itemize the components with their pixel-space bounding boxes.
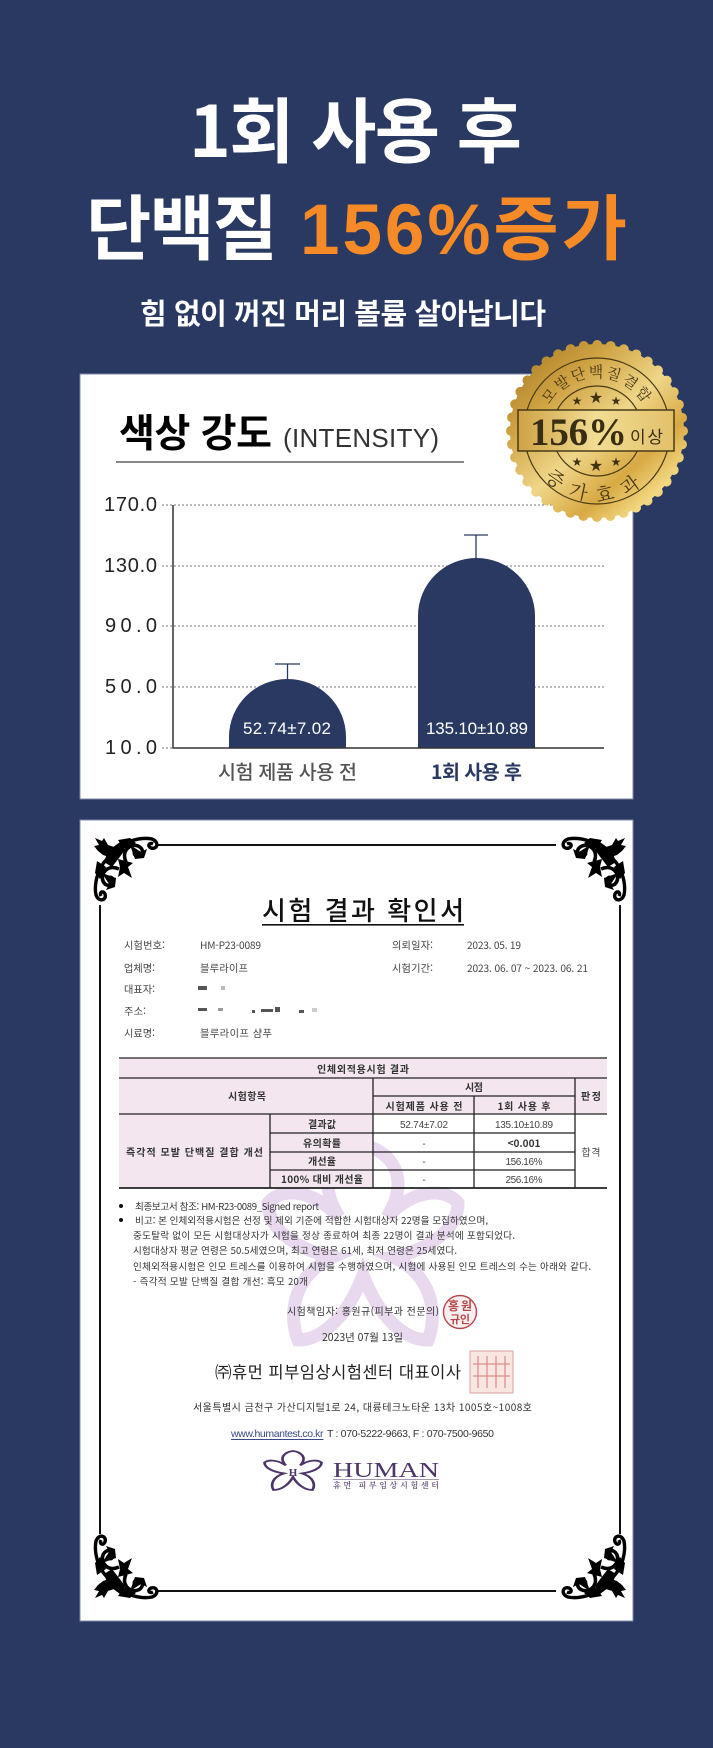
seal stars: ★	[572, 455, 582, 469]
results table: 256.16%	[506, 1175, 543, 1186]
certificate details: 주소:	[124, 1003, 146, 1018]
results table	[119, 1058, 607, 1188]
headline line 1: 1회 사용 후	[189, 76, 522, 178]
panel: test result certificate	[80, 820, 633, 1621]
certificate details: 블루라이프 샴푸	[200, 1025, 272, 1040]
seal band	[518, 410, 674, 451]
notes: 중도탈락 없이 모든 시험대상자가 시험을 정상 종료하여 최종 22명이 결과 분석에 포함되었다.	[133, 1228, 515, 1242]
chart heading	[116, 403, 464, 463]
seal stars	[572, 388, 621, 475]
x axis labels: 시험 제품 사용 전	[218, 756, 357, 785]
results table: 156.16%	[506, 1157, 543, 1168]
y axis labels: 130.0	[104, 555, 157, 577]
logo flower: H	[289, 1467, 298, 1479]
results table: -	[422, 1157, 426, 1168]
bar: after one use	[418, 535, 535, 748]
axes	[173, 505, 604, 748]
issuer: ㈜휴먼 피부임상시험센터 대표이사	[215, 1359, 461, 1383]
certificate details: HM-P23-0089	[200, 937, 261, 952]
y axis labels: 50.0	[105, 676, 157, 698]
results table: 52.74±7.02	[400, 1120, 448, 1131]
seal stars: ★	[572, 394, 582, 408]
certificate details: 블루라이프	[200, 960, 248, 975]
watermark flower	[268, 1145, 458, 1340]
headline	[86, 76, 627, 275]
y axis labels	[104, 494, 157, 759]
results table: 즉각적 모발 단백질 결합 개선	[126, 1144, 263, 1159]
contact	[230, 1428, 494, 1440]
panel: intensity chart	[80, 374, 633, 799]
redacted blurred text	[198, 986, 317, 1013]
notes	[119, 1199, 591, 1288]
results table: 유의확률	[303, 1135, 341, 1150]
icon: round red stamp: 홍원	[448, 1297, 472, 1314]
x axis labels	[218, 756, 522, 785]
results table: 1회 사용 후	[498, 1098, 550, 1113]
bar: before use: 52.74±7.02	[243, 719, 331, 738]
results table: 시점	[465, 1079, 483, 1094]
notes: 최종보고서 참조: HM-R23-0089_Signed report	[135, 1199, 319, 1213]
certificate title: 시험 결과 확인서	[262, 891, 464, 928]
logo flower	[264, 1451, 322, 1490]
contact: www.humantest.co.kr	[230, 1428, 324, 1440]
notes: 인체외적용시험은 인모 트레스를 이용하여 시험을 수행하였으며, 시험에 사용된 인모 트레스의 수는 아래와 같다.	[133, 1259, 591, 1273]
certificate details: 2023. 06. 07 ~ 2023. 06. 21	[467, 960, 588, 975]
certificate details	[124, 937, 588, 1040]
icon: gold seal badge: 이상	[630, 423, 663, 448]
results table: 결과값	[308, 1116, 336, 1131]
results table: 인체외적용시험 결과	[317, 1061, 409, 1076]
results table: 135.10±10.89	[495, 1120, 553, 1131]
x axis labels: 1회 사용 후	[431, 756, 522, 785]
seal top text: 모발단백질결합	[542, 364, 652, 404]
certificate details: 시험번호:	[124, 937, 165, 952]
certificate details: 시료명:	[124, 1025, 155, 1040]
bar: before use	[229, 664, 346, 748]
logo wordmark: HUMAN	[333, 1458, 439, 1482]
results table: 100% 대비 개선율	[281, 1171, 363, 1186]
icon: gold seal badge: 156%	[530, 411, 627, 454]
icon: gold seal badge	[506, 340, 688, 522]
notes: 비고: 본 인체외적용시험은 선정 및 제외 기준에 적합한 시험대상자 22명을 모집하였으며,	[135, 1213, 488, 1227]
date: 2023년 07월 13일	[322, 1330, 403, 1345]
results table: 합격	[582, 1144, 600, 1159]
y axis labels: 10.0	[105, 737, 157, 759]
y axis labels: 90.0	[105, 615, 157, 637]
logo: Human	[264, 1451, 439, 1490]
headline line 2	[86, 173, 627, 275]
results table: -	[422, 1139, 426, 1150]
results table: -	[422, 1175, 426, 1186]
subtitle: 힘 없이 꺼진 머리 볼륨 살아납니다	[140, 291, 546, 333]
notes: - 즉각적 모발 단백질 결합 개선: 흑모 20개	[133, 1274, 308, 1288]
certificate details: 대표자:	[124, 981, 155, 996]
seal stars: ★	[589, 388, 603, 407]
address: 서울특별시 금천구 가산디지털1로 24, 대륭테크노타운 13차 1005호~1008호	[193, 1399, 532, 1414]
certificate frame	[100, 845, 620, 1591]
results table: 시험항목	[228, 1088, 266, 1103]
seal stars: ★	[589, 456, 603, 475]
certificate details: 업체명:	[124, 960, 155, 975]
results table: <0.001	[508, 1135, 540, 1150]
results table: 판정	[581, 1088, 601, 1103]
notes: 시험대상자 평균 연령은 50.5세였으며, 최고 연령은 61세, 최저 연령은 25세였다.	[133, 1243, 457, 1257]
corner ornaments	[94, 838, 626, 1598]
seal bottom text: 증가효과	[548, 468, 639, 502]
y axis labels: 170.0	[104, 494, 157, 516]
headline line 2: 단백질	[86, 173, 278, 275]
contact: T : 070-5222-9663, F : 070-7500-9650	[327, 1428, 494, 1440]
results table: 개선율	[308, 1153, 336, 1168]
chart heading: 색상 강도	[119, 403, 272, 459]
logo subtitle: 휴먼 피부임상시험센터	[333, 1480, 439, 1490]
chart heading: (INTENSITY)	[283, 423, 439, 453]
seal stars: ★	[611, 455, 621, 469]
headline line 2: 156%증가	[300, 191, 627, 270]
gridlines	[162, 505, 604, 748]
seal stars: ★	[611, 394, 621, 408]
icon: square red stamp	[470, 1351, 513, 1393]
certificate details: 의뢰일자:	[392, 937, 433, 952]
certificate details: 2023. 05. 19	[467, 937, 521, 952]
bar: after one use: 135.10±10.89	[426, 719, 528, 738]
icon: round red stamp	[444, 1296, 476, 1328]
signature line: 시험책임자: 홍원규(피부과 전문의)	[287, 1303, 439, 1318]
certificate details: 시험기간:	[392, 960, 433, 975]
results table: 시험제품 사용 전	[386, 1098, 462, 1113]
icon: round red stamp: 규인	[450, 1311, 470, 1327]
